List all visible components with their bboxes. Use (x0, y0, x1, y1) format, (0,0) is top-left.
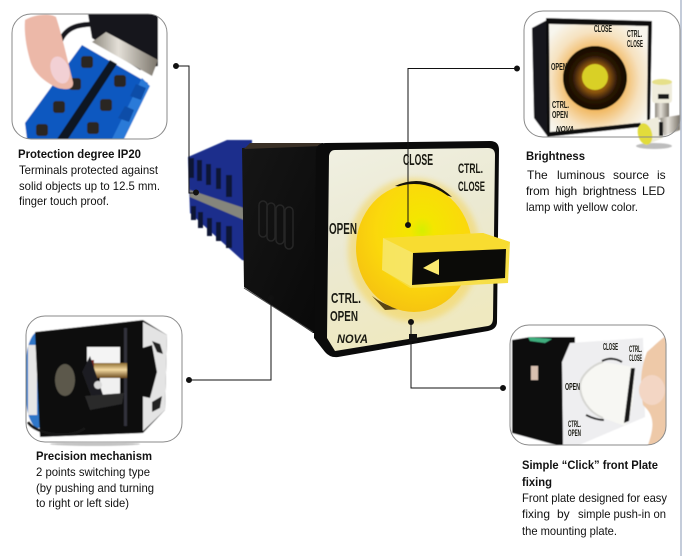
text: protection degree (18, 147, 160, 208)
switch labels: CTRL. (458, 160, 483, 176)
white knob (582, 364, 633, 424)
page edge strip (680, 0, 682, 556)
text: simple click front plate (522, 458, 667, 538)
text: protection degree: Terminals protected against (19, 163, 159, 177)
text: brightness: lamp with yellow color. (526, 200, 638, 214)
arrow indicator (423, 259, 439, 275)
text: precision mechanism (36, 449, 154, 510)
panel labels: OPEN (568, 428, 581, 438)
text: brightness: The (527, 168, 548, 182)
panel: click front plate photo: CLOSE (629, 353, 642, 363)
text: simple click front plate: Simple “Click” front Plate (522, 458, 658, 472)
text: simple click front plate: fixing (522, 507, 550, 521)
switch labels: OPEN (329, 221, 357, 238)
text: simple click front plate: fixing (522, 475, 552, 489)
panel labels: CTRL. (627, 29, 642, 40)
silver collar (92, 32, 158, 76)
main product: illuminated selector switch (188, 140, 510, 357)
gold shaft (93, 363, 127, 378)
connector: protection degree to terminals (174, 64, 198, 195)
panel labels: OPEN (551, 62, 567, 73)
panel: brightness photo: CLOSE (627, 39, 643, 50)
front bezel (314, 141, 499, 357)
front plate (143, 322, 167, 431)
switch labels: CLOSE (403, 152, 433, 169)
text: precision mechanism: 2 points switching type (36, 465, 150, 479)
hand (641, 336, 666, 445)
panel: click front plate photo: CTRL. (629, 344, 642, 354)
text: brightness: Brightness (526, 149, 585, 163)
text: protection degree: solid objects up to 12.5 mm. (19, 179, 160, 193)
panel labels: CTRL. (552, 100, 569, 111)
text: protection degree: Protection degree IP20 (18, 147, 141, 161)
text: simple click front plate: the mounting plate. (522, 524, 617, 538)
text: brightness (526, 149, 666, 214)
panel labels: OPEN (565, 382, 580, 393)
text: simple click front plate: by (557, 507, 570, 521)
panel labels: CLOSE (594, 24, 612, 35)
window behind shaft (87, 347, 120, 363)
connector: brightness to knob (406, 66, 520, 228)
text: precision mechanism: (by pushing and turning (36, 481, 154, 495)
lamp opening (563, 46, 627, 110)
text: brightness: source (613, 168, 649, 182)
terminal screws (36, 56, 126, 136)
panel: precision mechanism photo (24, 316, 182, 442)
text: simple click front plate: Front plate designed for easy (522, 491, 667, 505)
switch labels: CLOSE (458, 178, 485, 194)
switch labels (329, 152, 485, 346)
text: protection degree: finger touch proof. (19, 194, 109, 208)
connector: precision mechanism to housing (186, 296, 274, 382)
handle black window (412, 249, 506, 285)
front face plate (327, 148, 495, 351)
panel labels (551, 24, 643, 134)
rear terminal block (188, 140, 252, 262)
dark switch body behind the terminals (88, 14, 158, 70)
panel labels (565, 342, 642, 438)
text: brightness: luminous (557, 168, 605, 182)
switch labels: CTRL. (331, 290, 361, 307)
bottom notch (409, 334, 417, 341)
text: brightness: is (657, 168, 666, 182)
white plate (562, 338, 645, 448)
switch labels: OPEN (330, 308, 358, 325)
panel: protection degree photo (12, 14, 167, 139)
panel labels: NOVA (556, 125, 574, 134)
panel labels: OPEN (552, 110, 568, 121)
LED lamps (635, 79, 680, 149)
blue terminal block (25, 45, 148, 139)
knob handle (382, 233, 510, 288)
yellow glow on plate (348, 178, 480, 322)
text: precision mechanism: Precision mechanism (36, 449, 152, 463)
text: precision mechanism: to right or left side) (36, 496, 129, 510)
finger (25, 15, 73, 89)
open metal frame (35, 320, 167, 437)
panel labels: CLOSE (603, 342, 618, 353)
text: simple click front plate: simple push-in on (578, 507, 666, 521)
yellow knob (356, 184, 472, 312)
cable (28, 422, 85, 435)
panel labels: CTRL. (568, 419, 581, 429)
housing grip ridges (259, 201, 293, 249)
shadow under precision photo (50, 442, 140, 446)
connector: front plate to bezel (408, 320, 506, 390)
spring (55, 364, 75, 396)
panel: brightness photo (524, 11, 680, 149)
knob opening shadow arcs (395, 181, 452, 197)
text: brightness: from high brightness LED (526, 184, 665, 198)
switch labels: NOVA (337, 332, 368, 346)
panel: click front plate photo (510, 325, 666, 448)
side housing (242, 143, 323, 333)
black label strip (57, 60, 117, 139)
